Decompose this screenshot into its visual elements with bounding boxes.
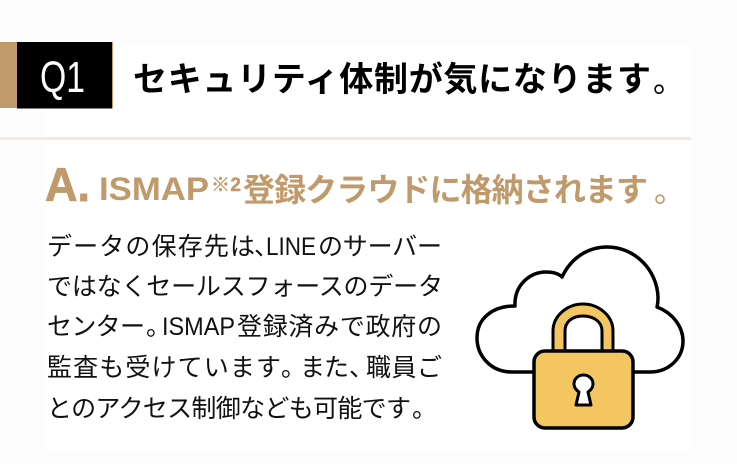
body line 3: ISMAP bbox=[162, 313, 235, 341]
body line 5: とのアクセス制御なども可能です bbox=[47, 395, 411, 423]
body line 4: 監査も受けています bbox=[47, 354, 281, 382]
answer heading: A. bbox=[45, 158, 90, 211]
body line 3: センター bbox=[47, 313, 145, 341]
body line 1: LINE bbox=[266, 233, 316, 261]
answer heading: 登録クラウドに格納されます bbox=[243, 172, 648, 208]
answer heading: 。 bbox=[654, 174, 685, 209]
body line 3: 。 bbox=[146, 313, 171, 341]
padlock shackle bbox=[553, 304, 613, 352]
answer heading: ※2 bbox=[211, 175, 241, 196]
body line 1: 、 bbox=[254, 233, 279, 261]
body line 3: 登録済みで政府の bbox=[237, 313, 442, 341]
body line 4: 。 bbox=[281, 354, 306, 382]
question heading: セキュリティ体制が気になります bbox=[133, 60, 651, 99]
question badge: Q1 bbox=[0, 42, 113, 108]
body line 4 bbox=[47, 354, 442, 382]
question heading: 。 bbox=[653, 64, 684, 99]
body line 4: また bbox=[300, 354, 349, 382]
answer heading: ISMAP bbox=[99, 171, 209, 207]
answer body text bbox=[47, 233, 443, 423]
body line 1: データの保存先は bbox=[47, 233, 255, 261]
body line 5: 。 bbox=[412, 395, 437, 423]
body line 4: 職員ご bbox=[366, 354, 442, 382]
body line 3 bbox=[47, 313, 442, 341]
body line 4: 、 bbox=[349, 354, 374, 382]
answer heading bbox=[45, 158, 685, 211]
icon: cloud with padlock bbox=[477, 247, 683, 428]
body line 1 bbox=[47, 233, 442, 261]
padlock keyhole bbox=[574, 375, 593, 405]
body line 1: のサーバー bbox=[318, 233, 442, 261]
question badge: Q1: Q1 bbox=[40, 53, 85, 102]
padlock body bbox=[534, 351, 633, 428]
cloud outline bbox=[477, 247, 683, 372]
body line 2: ではなくセールスフォースのデータ bbox=[47, 273, 443, 301]
